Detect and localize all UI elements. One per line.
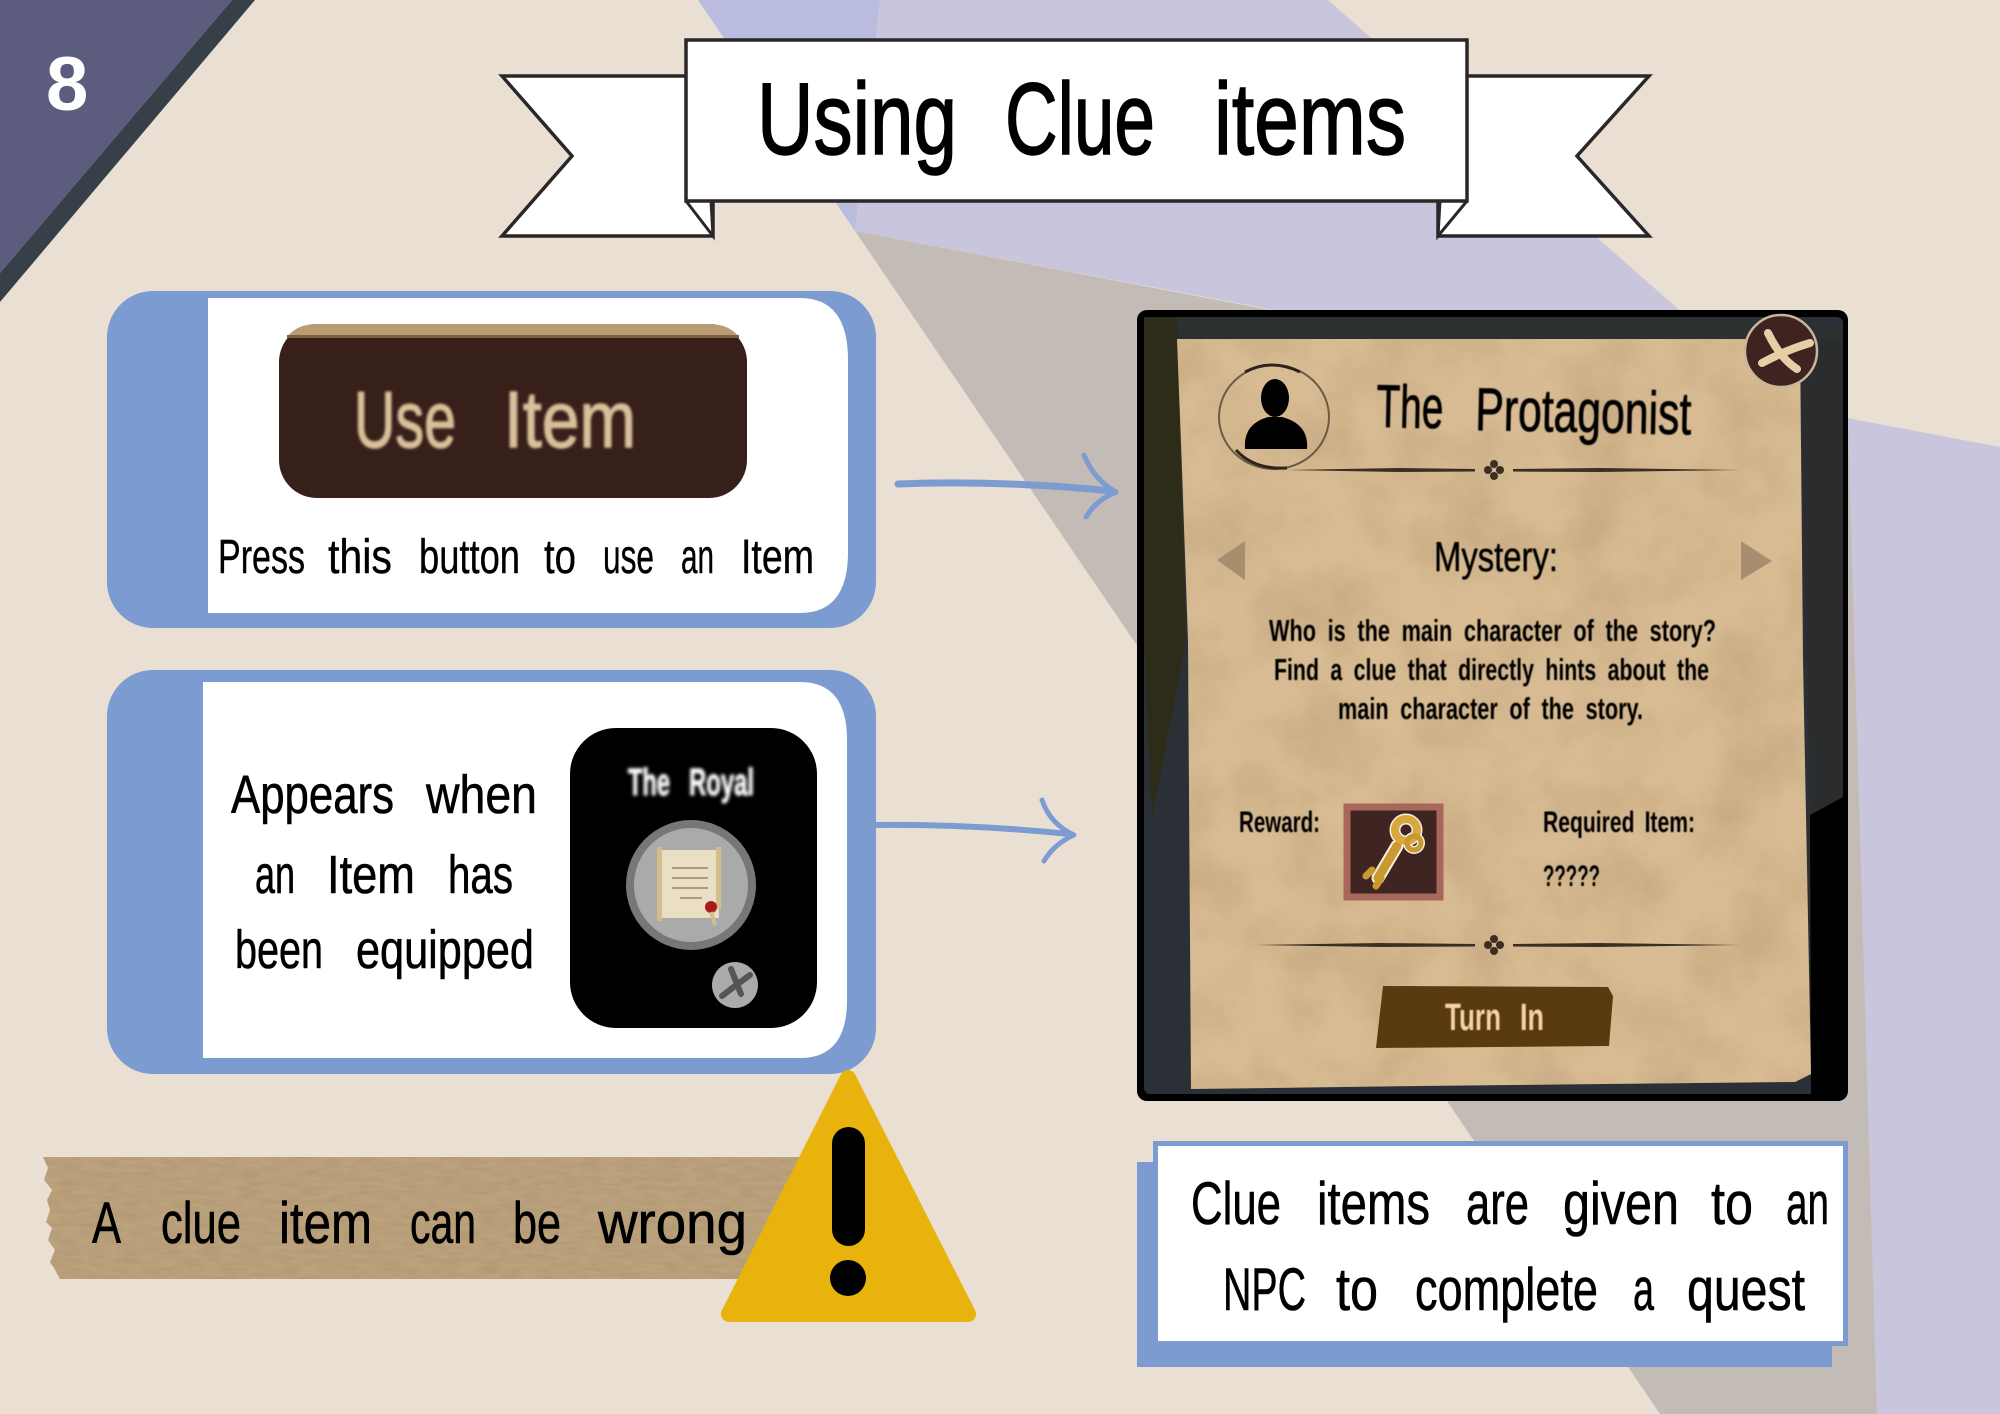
required item label (1543, 806, 1695, 893)
quest description: main character of the story. (1338, 691, 1643, 726)
callout text: complete (1415, 1256, 1598, 1323)
quest description: Who is the main character of the story? (1269, 613, 1716, 648)
caption: press button: this (328, 531, 392, 584)
use item button: Use (354, 375, 456, 464)
title (757, 62, 1406, 176)
text: appears when equipped: been (235, 920, 323, 980)
arrow: to game window top (898, 455, 1116, 517)
text: appears when equipped: Item (327, 845, 415, 905)
note text: item (279, 1191, 372, 1256)
text: appears when equipped (231, 765, 537, 980)
note text: can (410, 1191, 476, 1256)
equipped item widget: The (628, 762, 670, 804)
note text (92, 1191, 747, 1256)
use item button (279, 324, 747, 498)
turn in button: Turn (1445, 997, 1501, 1039)
icon: scroll (657, 847, 721, 925)
quest description (1269, 613, 1716, 726)
title: items (1214, 62, 1406, 176)
nav arrows (1217, 541, 1772, 580)
divider bottom (1255, 935, 1740, 955)
callout text: an (1786, 1170, 1829, 1237)
callout text: items (1317, 1170, 1430, 1237)
text: appears when equipped: equipped (356, 920, 534, 980)
icon: protagonist portrait (1219, 365, 1329, 469)
character name: The (1376, 373, 1444, 441)
caption: press button: button (419, 531, 520, 584)
caption: press button: use (603, 531, 654, 584)
reward label: Reward: (1239, 806, 1320, 839)
page number corner (0, 0, 255, 302)
icon: close disabled (712, 962, 758, 1008)
callout text: to (1711, 1170, 1753, 1237)
note strip: clue item can be wrong (43, 1157, 830, 1279)
game window screenshot (1137, 310, 1848, 1101)
text: appears when equipped: an (255, 845, 295, 905)
callout text (1191, 1170, 1829, 1323)
reward key item (1347, 807, 1440, 897)
caption: press button: Press (218, 531, 305, 584)
text: appears when equipped: has (448, 845, 513, 905)
note text: wrong (597, 1191, 747, 1256)
title: Using (757, 62, 957, 176)
character name (1376, 373, 1692, 447)
parchment (1177, 339, 1811, 1089)
caption: press button: an (681, 531, 714, 584)
title banner (502, 40, 1649, 236)
page number: 8 (46, 42, 88, 127)
caption: press button: to (544, 531, 576, 584)
note text: A (92, 1191, 121, 1256)
panel: equipped item (107, 670, 876, 1074)
text: appears when equipped: Appears (231, 765, 394, 825)
title: Clue (1005, 62, 1155, 176)
panel: use item (107, 291, 876, 628)
callout text: Clue (1191, 1170, 1281, 1237)
turn in button (1376, 986, 1613, 1048)
callout text: NPC (1223, 1256, 1306, 1323)
equipped item widget (570, 728, 817, 1028)
turn in button: In (1520, 997, 1544, 1039)
note text: clue (161, 1191, 241, 1256)
icon: close button (1745, 315, 1817, 387)
callout text: quest (1687, 1256, 1805, 1323)
icon: warning triangle (729, 1078, 968, 1314)
quest description: Find a clue that directly hints about the (1274, 652, 1709, 687)
caption: press button: Item (741, 531, 814, 584)
arrow: to game window bottom (876, 800, 1074, 861)
caption: press button (218, 531, 814, 584)
text: appears when equipped: when (425, 765, 537, 825)
divider top (1287, 460, 1740, 480)
equipped item widget: Royal (689, 762, 754, 804)
required item label: Required Item: (1543, 806, 1695, 839)
callout text: are (1466, 1170, 1529, 1237)
character name: Protagonist (1475, 376, 1692, 447)
note text: be (513, 1191, 561, 1256)
callout text: to (1336, 1256, 1378, 1323)
callout text: a (1633, 1256, 1654, 1323)
callout text: given (1563, 1170, 1679, 1237)
callout: clue items given to npc (1137, 1144, 1846, 1367)
required item label: ????? (1543, 860, 1600, 893)
quest heading: Mystery: (1434, 533, 1558, 580)
use item button: Item (504, 375, 636, 464)
